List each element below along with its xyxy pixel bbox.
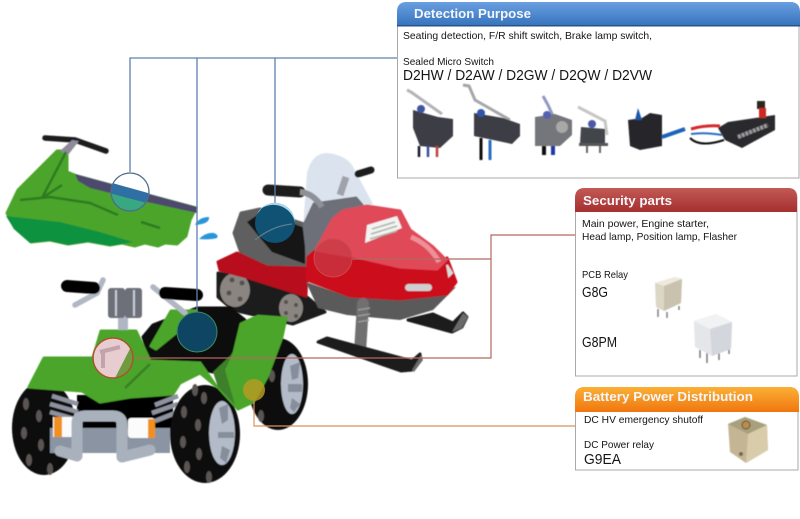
text: G9EA: G9EA	[584, 451, 621, 468]
icon: G8G relay	[655, 277, 682, 318]
panel: Battery Power Distribution	[575, 387, 799, 470]
text: detection uses: Seating detection, F/R shift switch, Brake lamp switch,	[403, 30, 652, 42]
text: switch models: D2HW / D2AW / D2GW / D2QW / D2VW	[403, 67, 653, 84]
panel header: Battery Power Distribution: Battery Power Distribution	[583, 389, 753, 404]
icon: G9EA relay	[728, 417, 768, 463]
text: PCB Relay: PCB Relay	[582, 269, 629, 281]
icon: wired sealed switch	[690, 101, 775, 148]
text: security uses: Head lamp, Position lamp, Flasher	[582, 231, 737, 243]
marker: ATV seat	[177, 312, 217, 352]
text: G8PM: G8PM	[582, 334, 617, 351]
panel header: Detection Purpose: Detection Purpose	[414, 6, 531, 21]
connector: blue lines to Detection Purpose	[130, 58, 397, 312]
icon: D2AW switch	[463, 85, 520, 160]
marker: jet ski seat	[110, 172, 150, 212]
icon: D2HW switch	[407, 90, 453, 157]
marker: ATV battery	[243, 379, 265, 401]
panel header: Battery Power Distribution	[575, 387, 799, 412]
connector: orange line to Battery Power Distribution	[254, 401, 575, 426]
panel header: Detection Purpose	[397, 2, 800, 26]
icon: D2GW switch	[535, 96, 572, 155]
icon: D2VW switch	[628, 108, 685, 150]
marker: ATV headlamp	[92, 337, 134, 379]
icon: water drops	[195, 217, 218, 239]
illustration: jet ski	[6, 138, 218, 246]
marker: snowmobile headlamp	[314, 239, 352, 277]
illustration: snowmobile	[218, 153, 468, 372]
text: Sealed Micro Switch: Sealed Micro Switch	[403, 56, 494, 68]
panel header: Security parts: Security parts	[583, 193, 672, 208]
text: security uses: Main power, Engine starter,	[582, 218, 709, 230]
text: DC HV emergency shutoff: DC HV emergency shutoff	[584, 414, 703, 426]
text: DC Power relay: DC Power relay	[584, 439, 655, 451]
icon: D2QW switch	[578, 107, 608, 153]
marker: snowmobile seat	[255, 203, 295, 243]
panel header: Security parts	[575, 188, 797, 212]
panel: Detection Purpose	[397, 2, 800, 178]
text: security uses	[582, 218, 737, 243]
connector: red lines to Security parts	[135, 235, 575, 358]
icon: G8PM relay	[694, 314, 732, 363]
panel: Security parts	[575, 188, 797, 376]
text: G8G: G8G	[582, 284, 608, 301]
illustration: ATV	[12, 280, 308, 483]
